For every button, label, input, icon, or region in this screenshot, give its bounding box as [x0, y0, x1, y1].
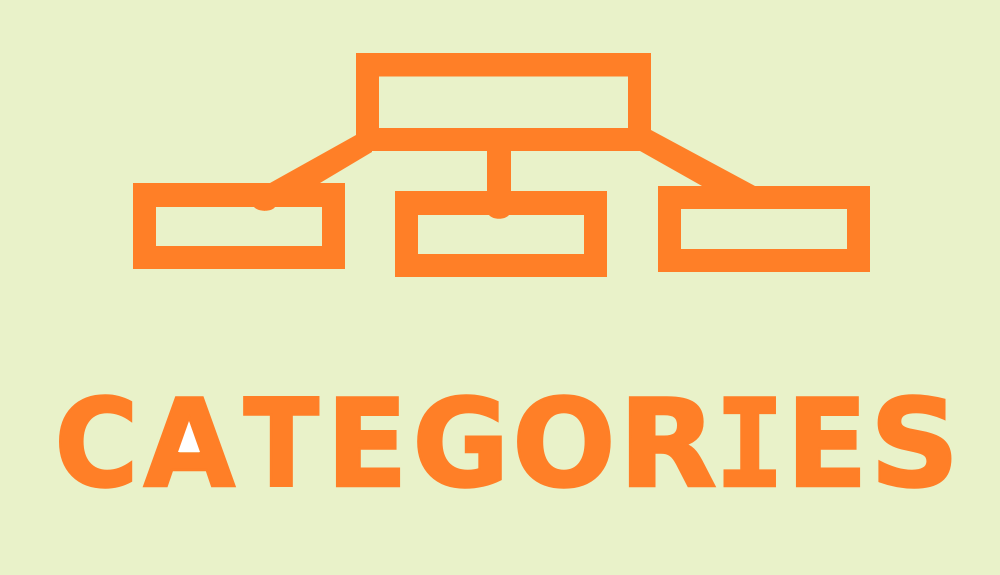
middle connector: [487, 150, 511, 195]
title: R: [618, 374, 717, 515]
title: S: [870, 373, 959, 515]
title: [54, 373, 959, 515]
title: A: [144, 374, 235, 515]
left connector dot: [254, 205, 275, 211]
icon: hierarchy diagram: [133, 53, 870, 277]
title: E: [786, 374, 868, 515]
right connector: [640, 130, 755, 186]
title: I: [715, 373, 784, 515]
title: T: [244, 374, 319, 515]
right box: [658, 186, 870, 272]
middle box: [395, 191, 607, 277]
left box: [133, 183, 345, 269]
top box: [356, 53, 651, 151]
middle connector dot: [489, 213, 509, 219]
left connector: [264, 135, 372, 211]
title: G: [412, 374, 509, 515]
title: E: [326, 374, 408, 515]
title: O: [512, 373, 616, 515]
title: C: [54, 374, 138, 515]
